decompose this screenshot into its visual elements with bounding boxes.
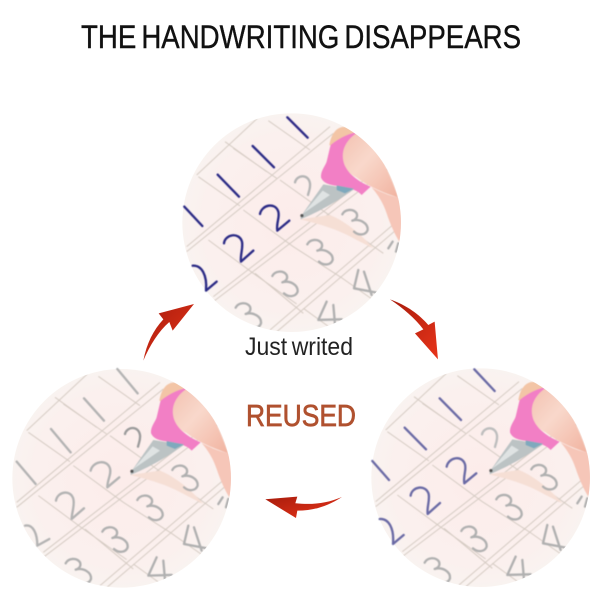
label: REUSED: REUSED — [246, 398, 356, 433]
photo circle: just written, blue digits — [180, 110, 403, 333]
caption: Just writed: Just writed — [245, 333, 353, 361]
arrow: right to bottom-left — [265, 497, 342, 518]
digits: fresh blue handwriting — [184, 117, 310, 291]
arrow: bottom-left to top — [143, 304, 194, 361]
title: THE HANDWRITING DISAPPEARS — [81, 19, 521, 55]
arrow: top to right — [390, 299, 438, 359]
digits: faded grey handwriting — [17, 369, 140, 546]
photo circle: handwriting faded, grey digits — [10, 366, 233, 589]
digits: fading blue-grey handwriting — [372, 369, 497, 544]
photo circle: handwriting fading, blue-grey digits — [369, 365, 592, 588]
